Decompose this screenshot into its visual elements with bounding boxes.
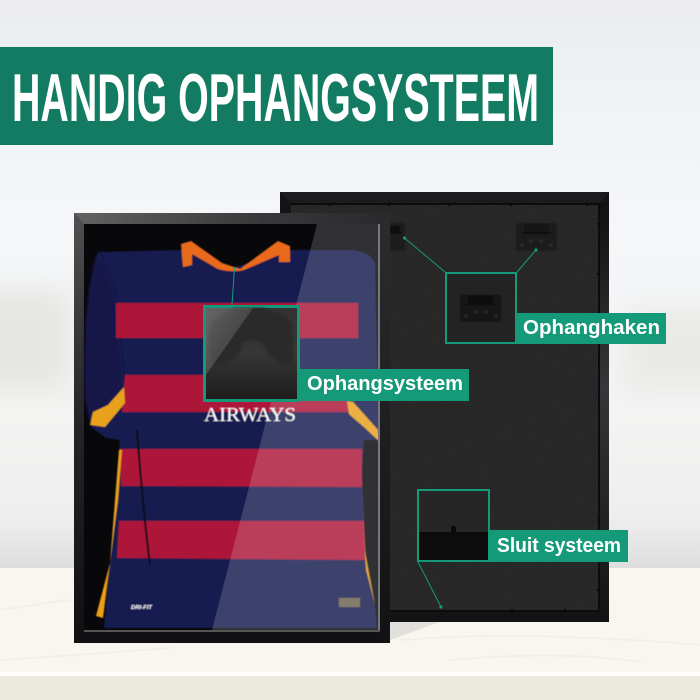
- label: Ophanghaken: Ophanghaken: [523, 317, 660, 339]
- icon: closure clip: [451, 526, 456, 534]
- callout: Ophanghaken zoom box: [446, 273, 516, 343]
- label: Sluit systeem: [490, 530, 628, 562]
- jersey left sleeve cuff: [90, 387, 125, 427]
- icon: hanging system shape: [209, 308, 293, 367]
- dark crease: [137, 430, 150, 565]
- DRI-FIT mark: DRI-FIT: [131, 605, 153, 611]
- sponsor: AIRWAYS: AIRWAYS: [204, 404, 296, 426]
- jersey collar: [181, 241, 290, 271]
- jersey: [86, 241, 379, 628]
- callout: Ophangsysteem zoom box: [204, 306, 298, 400]
- panel: back of frame: [280, 192, 609, 622]
- label: Ophangsysteem: [300, 369, 469, 401]
- jersey body: [86, 250, 379, 628]
- jersey left side stripe: [96, 450, 122, 618]
- callout lines: hooks: [403, 236, 538, 272]
- label: Ophangsysteem: Ophangsysteem: [307, 373, 463, 395]
- title banner: [0, 47, 553, 145]
- red stripes: [116, 303, 366, 560]
- callout line: closure: [418, 562, 443, 609]
- icon: hook detail: [460, 295, 501, 322]
- glass reflection: [212, 224, 380, 632]
- jersey left sleeve shade: [86, 252, 122, 428]
- callout line: neck to hanging system: [232, 267, 234, 305]
- icon: sealing ticks along frame: [329, 203, 600, 612]
- jersey authenticity tag: [339, 598, 360, 607]
- label: Sluit systeem: Sluit systeem: [497, 535, 621, 557]
- jersey right side stripe: [362, 505, 375, 604]
- jersey right sleeve cuff: [347, 401, 379, 441]
- panel: front of frame with jersey: [74, 213, 390, 643]
- label: Ophanghaken: [517, 313, 666, 344]
- icon: right hanging hook: [516, 223, 557, 251]
- callout: Sluit systeem zoom box: [418, 490, 489, 561]
- icon: left hanging hook: [390, 223, 405, 251]
